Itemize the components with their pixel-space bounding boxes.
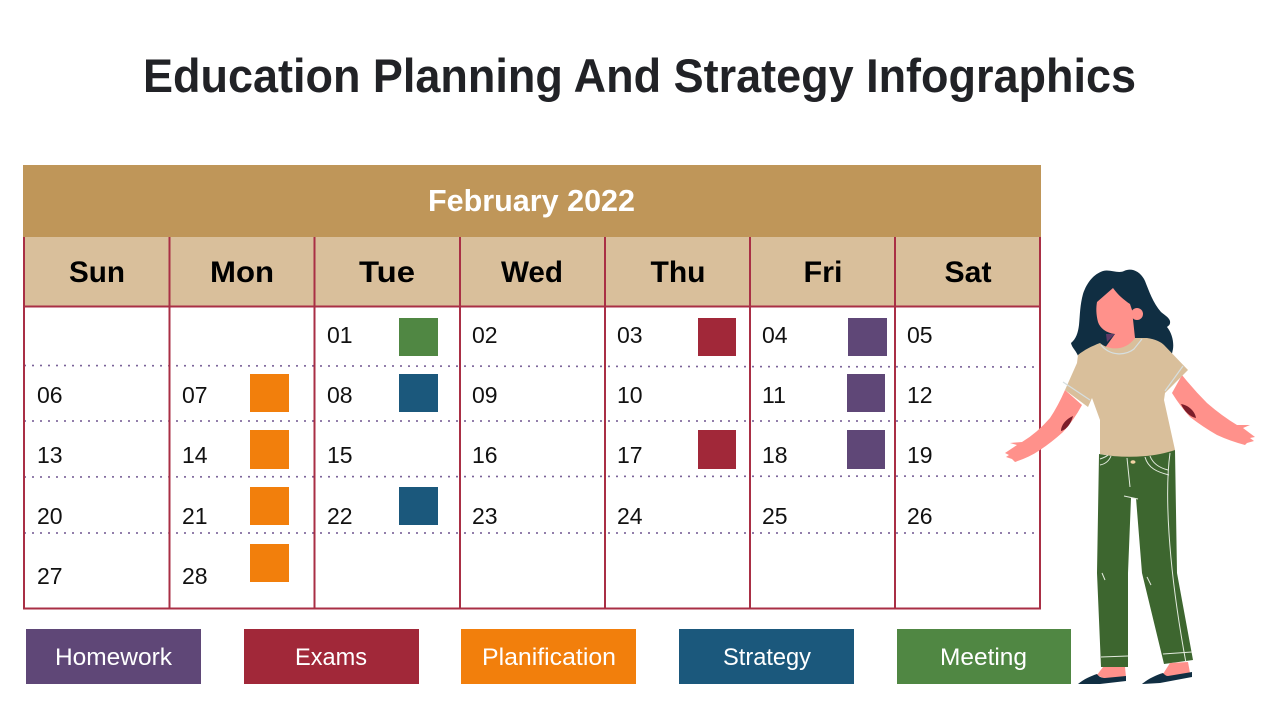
- date numbers: 14: [182, 442, 208, 468]
- date numbers: 25: [762, 503, 788, 529]
- date numbers: 09: [472, 382, 498, 408]
- legend: homework: [26, 629, 201, 684]
- legend: exams: [244, 629, 419, 684]
- date numbers: 02: [472, 322, 498, 348]
- weekday header row: Fri: [804, 256, 842, 289]
- legend: [26, 629, 1071, 684]
- shirt hems: [1063, 339, 1183, 400]
- weekday header row: Sat: [944, 256, 992, 289]
- date numbers: 18: [762, 442, 788, 468]
- hair: [1071, 270, 1173, 358]
- date numbers: 24: [617, 503, 643, 529]
- weekday header row: Wed: [501, 256, 563, 289]
- title: Education Planning And Strategy Infographics: [143, 49, 1136, 102]
- date numbers: 26: [907, 503, 933, 529]
- date numbers: 17: [617, 442, 643, 468]
- face and neck: [1096, 288, 1142, 352]
- date numbers: 07: [182, 382, 208, 408]
- event markers: [250, 318, 887, 582]
- right arm: [1172, 375, 1255, 445]
- date numbers: 11: [762, 382, 786, 408]
- month header bar: February 2022: [428, 183, 635, 218]
- ear: [1131, 308, 1143, 320]
- date numbers: 05: [907, 322, 933, 348]
- date numbers: 20: [37, 503, 63, 529]
- ankles: [1097, 662, 1190, 679]
- weekday header row: Mon: [210, 256, 274, 289]
- trousers: [1097, 450, 1193, 667]
- date numbers: 03: [617, 322, 643, 348]
- legend: strategy: Strategy: [723, 644, 811, 671]
- panel: calendar: [23, 165, 1041, 609]
- trouser button: [1130, 460, 1136, 464]
- date numbers: 19: [907, 442, 933, 468]
- date numbers: 01: [327, 322, 353, 348]
- weekday header row: [23, 237, 1041, 307]
- legend: planification: Planification: [482, 644, 616, 671]
- weekday header row: Tue: [359, 256, 415, 289]
- left arm: [1005, 390, 1082, 462]
- date numbers: 23: [472, 503, 498, 529]
- shirt: [1065, 338, 1188, 457]
- date numbers: 28: [182, 563, 208, 589]
- legend: meeting: [897, 629, 1071, 684]
- shoes: [1078, 672, 1192, 684]
- illustration: woman standing with open arms: [1005, 270, 1255, 684]
- month header bar: [23, 165, 1041, 237]
- neck shadow: [1106, 334, 1115, 342]
- date numbers: 06: [37, 382, 63, 408]
- date numbers: 10: [617, 382, 643, 408]
- date numbers: 13: [37, 442, 63, 468]
- date numbers: 16: [472, 442, 498, 468]
- elbow shadows: [1061, 404, 1196, 431]
- legend: exams: Exams: [295, 644, 367, 671]
- date numbers: 08: [327, 382, 353, 408]
- trouser seams: [1100, 453, 1192, 663]
- legend: homework: Homework: [55, 644, 173, 671]
- weekday header row: Thu: [650, 256, 706, 289]
- date numbers: 27: [37, 563, 63, 589]
- date numbers: [37, 322, 933, 589]
- date numbers: 12: [907, 382, 933, 408]
- date numbers: 22: [327, 503, 353, 529]
- weekday header row: Sun: [69, 256, 125, 289]
- legend: meeting: Meeting: [940, 644, 1027, 671]
- date numbers: 21: [182, 503, 208, 529]
- legend: strategy: [679, 629, 854, 684]
- date numbers: 04: [762, 322, 788, 348]
- date numbers: 15: [327, 442, 353, 468]
- legend: planification: [461, 629, 636, 684]
